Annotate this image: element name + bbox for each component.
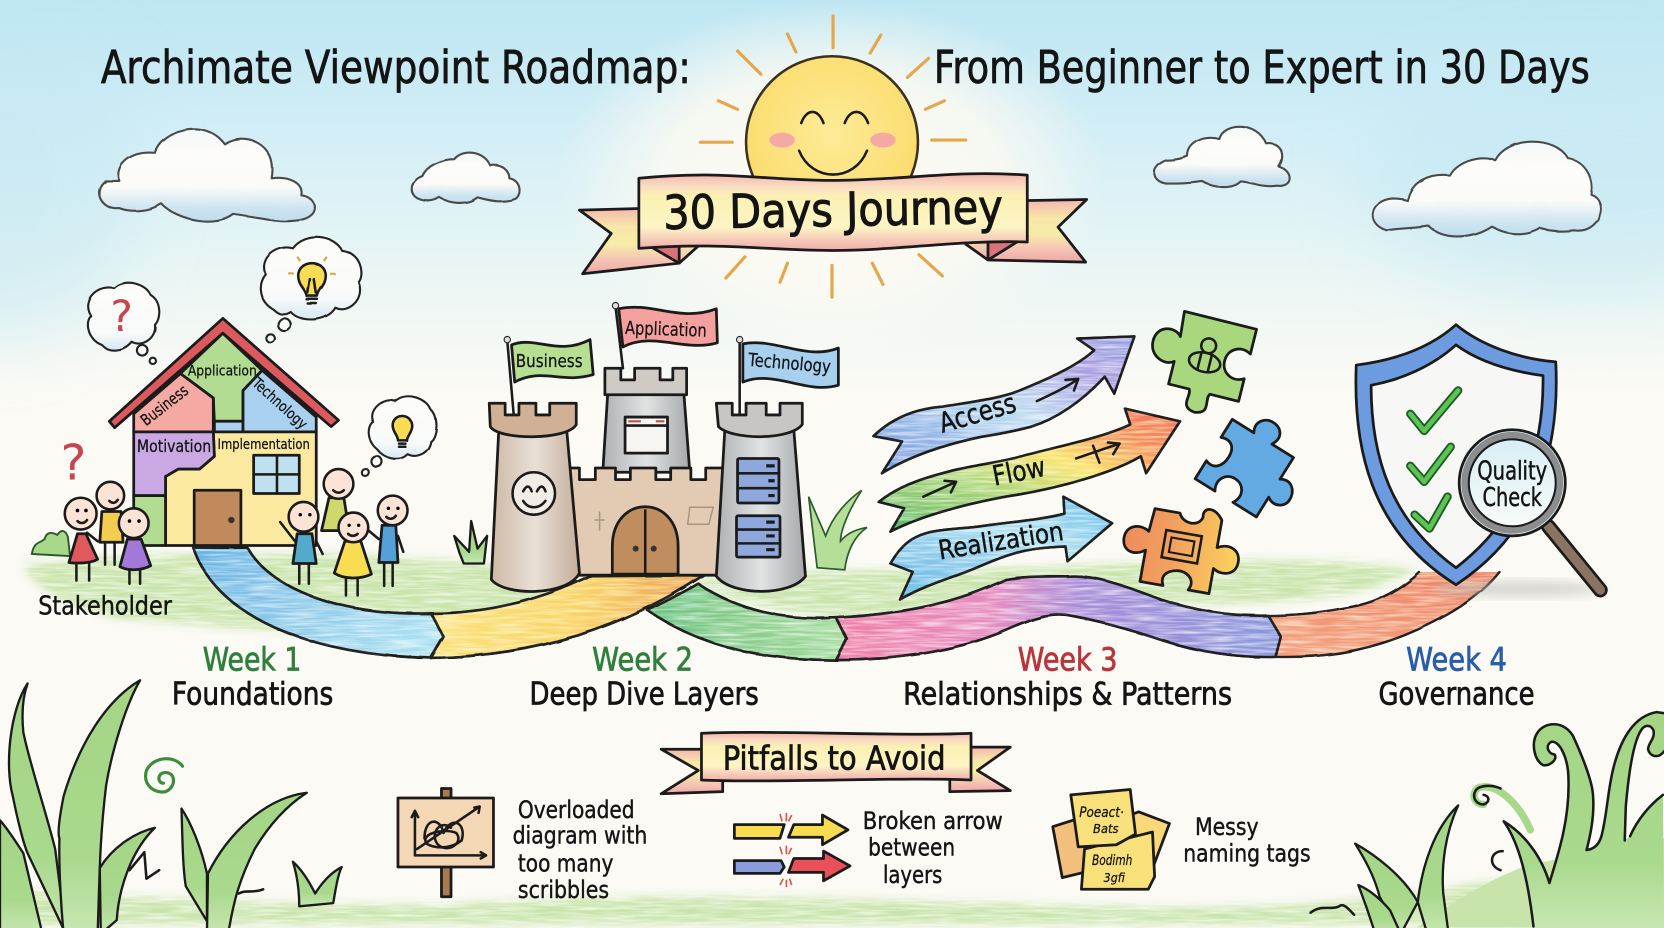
window	[254, 455, 299, 493]
segment: week 1 blue	[193, 548, 444, 658]
castle wall	[569, 468, 724, 575]
week 3 label: Week 3	[1018, 641, 1117, 679]
person green	[322, 469, 353, 531]
magnifying glass: Quality	[1477, 457, 1547, 487]
grass tuft: left of castle	[454, 521, 487, 564]
sun disc	[746, 56, 918, 228]
person blue right	[366, 496, 408, 586]
broken arrow: yellow	[734, 825, 784, 838]
icon: rectangle	[1162, 530, 1202, 563]
icon: small light bulb	[393, 416, 412, 447]
cloud: far left	[99, 129, 315, 222]
banner label: 30 Days Journey	[663, 181, 1003, 241]
week 2 label: Week 2	[592, 641, 693, 679]
checkmarks	[1410, 391, 1458, 528]
thin fern	[1474, 787, 1530, 830]
checkmark colour	[1410, 391, 1458, 528]
cloud: far right	[1373, 142, 1601, 236]
break sparks	[780, 813, 792, 887]
front note lower	[1081, 832, 1155, 889]
blade in front of fern	[1504, 821, 1560, 928]
shield inner	[1371, 345, 1543, 568]
icon: server rack top	[738, 458, 779, 503]
foundation green block	[134, 496, 166, 545]
flag: application	[612, 302, 717, 368]
banner: 30 Days Journey	[579, 174, 1087, 274]
grass: bottom left	[0, 680, 342, 928]
house labels: Business	[137, 381, 192, 430]
question mark: ?	[60, 435, 86, 492]
relationship arrows	[873, 336, 1180, 600]
house of Archimate layers	[109, 318, 339, 545]
ground under ferns	[1417, 838, 1664, 928]
person red	[65, 498, 98, 580]
person yellow	[97, 482, 124, 565]
week 1 label	[172, 641, 333, 713]
arrow: flow: Flow	[990, 450, 1048, 492]
week labels	[172, 641, 1535, 713]
house labels: Technology	[248, 374, 311, 433]
middle tower	[603, 368, 690, 472]
ground: green meadow	[0, 550, 1664, 928]
pitfall text: broken arrow	[863, 806, 1003, 889]
icon: server rack bottom	[736, 516, 780, 557]
scribbles	[412, 807, 486, 859]
house labels: Implementation	[218, 437, 310, 453]
sun with smiling face and rays	[700, 16, 966, 297]
icon: light bulb	[289, 257, 335, 304]
sun rays	[700, 16, 966, 297]
arrow: access	[873, 336, 1134, 473]
layer: motivation	[134, 432, 214, 496]
week 3 label	[903, 641, 1232, 713]
house labels: Application	[188, 364, 257, 380]
thought bubble: question	[88, 283, 159, 364]
sign board	[398, 798, 493, 867]
back notes	[1053, 817, 1093, 878]
left tower	[489, 403, 579, 591]
pitfall text: messy naming: Messy	[1195, 812, 1259, 841]
pitfall: overloaded diagram sign	[398, 788, 493, 897]
sign post	[441, 788, 451, 897]
icon: smiley	[513, 472, 555, 515]
stakeholder group left	[60, 435, 151, 584]
banner body	[639, 174, 1027, 250]
puzzle piece: orange and yellow	[1117, 496, 1246, 598]
roof	[109, 318, 339, 428]
segment: week 3 pink to purple	[836, 576, 1281, 660]
door	[194, 490, 241, 545]
front note upper: Poeact·	[1079, 805, 1124, 821]
front note upper	[1071, 790, 1136, 847]
layer: technology	[243, 370, 316, 432]
layer: strip	[214, 421, 243, 432]
grass tuft: right of castle	[809, 490, 867, 570]
segment: week 4 orange	[1268, 572, 1500, 657]
pitfall text: messy naming: naming tags	[1183, 839, 1311, 868]
shield with checks	[1356, 325, 1602, 596]
front note upper: Bats	[1093, 822, 1119, 837]
front note lower: 3gfi	[1104, 871, 1126, 886]
week 4 label: Governance	[1379, 677, 1535, 713]
magnifying glass	[1459, 430, 1600, 590]
week 3 label: Relationships & Patterns	[903, 677, 1232, 713]
castle gate	[612, 507, 678, 574]
pitfall text: broken arrow: Broken arrow	[863, 806, 1003, 835]
spiral	[146, 759, 183, 792]
layer: implementation	[166, 432, 316, 545]
week 1 label: Week 1	[203, 641, 301, 679]
arrow: realization	[890, 497, 1112, 600]
week 1 label: Foundations	[172, 677, 333, 713]
thought bubble: light bulb large	[260, 237, 361, 343]
large fern fill	[1533, 712, 1664, 928]
flag: application: Application	[625, 318, 707, 342]
flag: technology: Technology	[747, 350, 832, 378]
week 2 label	[530, 641, 759, 713]
puzzle piece: green	[1139, 306, 1257, 422]
banner tails	[579, 207, 700, 274]
pitfall text: messy naming	[1183, 812, 1311, 868]
puzzle piece: blue	[1195, 403, 1320, 527]
pitfall text: overloaded diagram: diagram with	[513, 821, 647, 850]
broken arrow: blue and red	[734, 861, 784, 873]
week 4 label	[1379, 641, 1535, 713]
right tower	[716, 403, 805, 591]
grass: bottom right	[1311, 712, 1664, 928]
arrow: flow	[879, 409, 1180, 532]
layer: application	[180, 333, 262, 421]
week 4 label: Week 4	[1406, 641, 1507, 679]
pitfall text: broken arrow: between	[868, 832, 955, 861]
castle	[489, 302, 838, 591]
pitfall text: overloaded diagram: too many	[518, 848, 613, 877]
front note lower: Bodimh	[1092, 853, 1132, 869]
pitfall: messy sticky notes	[1053, 790, 1169, 889]
cloud: small left	[412, 153, 520, 203]
pitfall text: overloaded diagram	[513, 795, 647, 904]
arrow: access: Access	[935, 386, 1020, 440]
segment: week 2 green	[647, 584, 847, 660]
person purple	[119, 508, 151, 584]
banner: pitfalls to avoid: Pitfalls to Avoid	[723, 738, 946, 777]
pitfall text: broken arrow: layers	[883, 860, 942, 889]
segment: week 2 yellow orange	[431, 575, 704, 658]
flag: business	[504, 336, 593, 414]
person yellow dress	[334, 513, 371, 595]
thought bubble: question: ?	[110, 293, 133, 342]
banner: pitfalls to avoid	[661, 732, 1010, 794]
fern ink outlines	[1504, 712, 1664, 926]
blades left of ferns	[1355, 844, 1418, 928]
house labels	[137, 364, 311, 457]
roadmap ribbon	[193, 548, 1500, 660]
flag: technology	[736, 336, 838, 414]
thought bubble: light bulb small	[361, 396, 436, 476]
pitfall text: overloaded diagram: Overloaded	[518, 795, 635, 824]
shadow	[1433, 582, 1602, 596]
pitfall text: overloaded diagram: scribbles	[518, 875, 609, 904]
shield outer	[1356, 325, 1556, 585]
stakeholder label: Stakeholder	[38, 591, 172, 621]
title: left part: Archimate Viewpoint Roadmap:	[101, 41, 691, 94]
arrow: realization: Realization	[936, 516, 1066, 566]
week 2 label: Deep Dive Layers	[530, 677, 759, 713]
pitfall: broken arrows	[734, 813, 850, 887]
icon: person	[1187, 335, 1226, 375]
left grass tuft	[32, 531, 70, 556]
flag: business: Business	[516, 351, 583, 372]
sun face	[769, 112, 896, 175]
cloud: small right	[1154, 127, 1290, 187]
people group right	[280, 469, 408, 595]
person blue left	[280, 502, 323, 584]
magnifying glass: Check	[1483, 483, 1542, 513]
house labels: Motivation	[137, 437, 211, 457]
layer: business	[134, 374, 213, 432]
